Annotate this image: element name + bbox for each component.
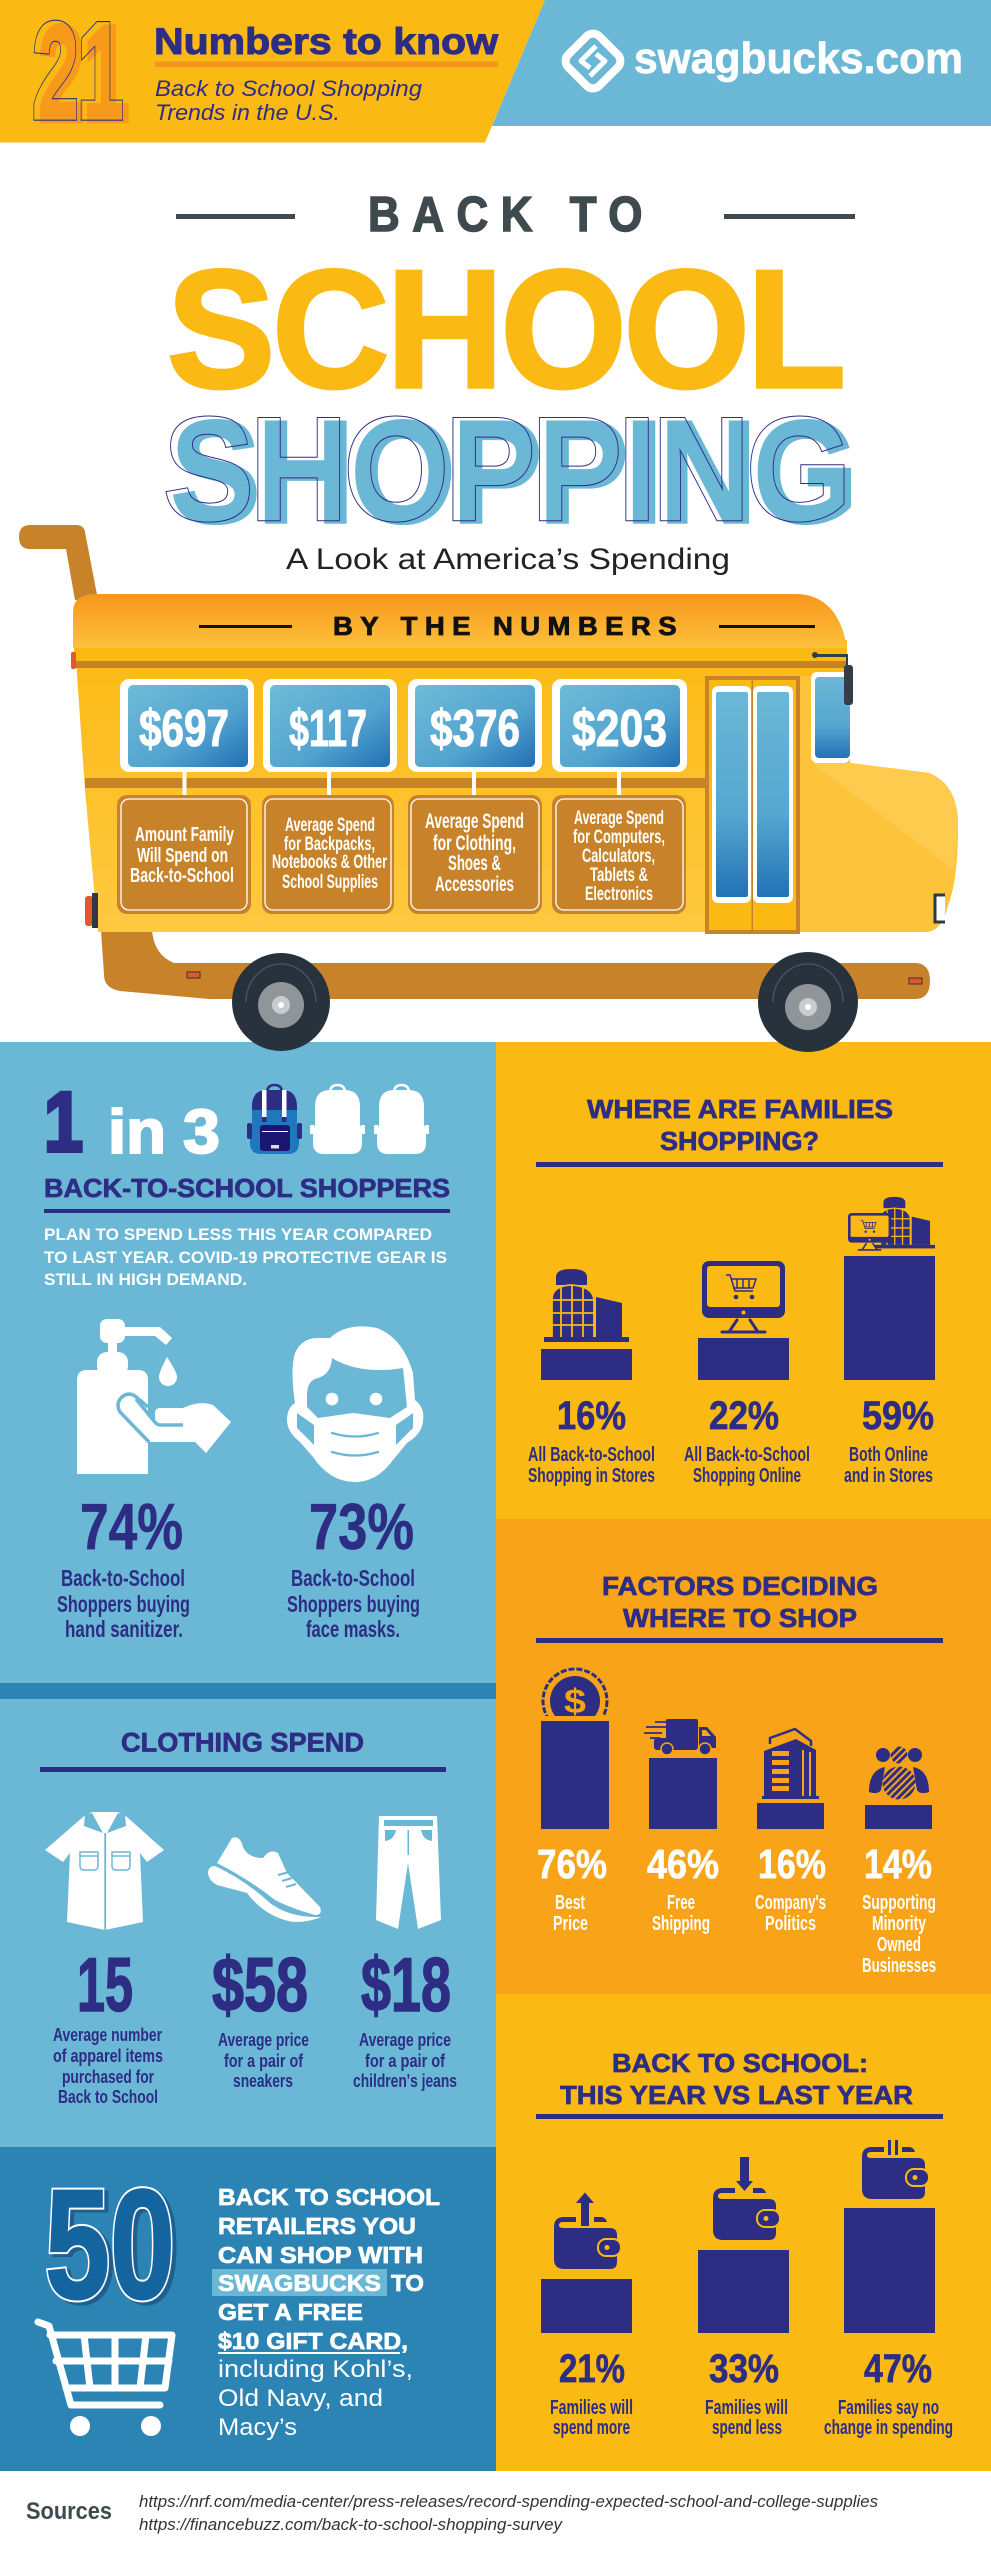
apparel items stat: of apparel items [53,2046,163,2066]
label box 4: for Computers, [573,827,665,848]
bus handle [19,525,98,600]
stat: online: 22% [709,1394,779,1438]
promo text: Macy’s [218,2414,297,2441]
label box 2: Average Spend [285,815,375,836]
apparel items stat: 15 [77,1943,133,2028]
back to heading [176,188,855,242]
source links [139,2492,878,2534]
shopping heading [165,416,852,526]
back to heading: BACK TO [368,188,655,242]
sneakers stat [212,1943,309,2091]
mirror [812,652,853,705]
school heading: SCHOOL [167,235,843,423]
mask stat [287,1490,420,1642]
number 21 [34,20,129,124]
number 21: 21 [39,0,129,149]
icon: jeans [376,1816,441,1929]
stat: both [844,1394,934,1487]
bus body [73,640,958,932]
1 in 3 figure [44,1075,220,1169]
header banner [0,0,991,149]
lower stripe [85,778,705,788]
window $117: $117 [289,700,367,758]
jeans stat: Average price [359,2030,451,2050]
jeans stat: $18 [361,1943,451,2028]
jeans stat: for a pair of [365,2051,446,2071]
mask stat: Shoppers buying [287,1591,420,1617]
apparel items stat: Average number [53,2025,162,2045]
shopping heading: SHOPPING [171,391,855,553]
hood highlight [812,763,958,870]
window $203 [552,679,687,772]
stat: both: 59% [862,1394,934,1438]
by the numbers heading [199,611,815,641]
stat: no change: Families say no [838,2397,939,2419]
clothing heading: CLOTHING SPEND [121,1728,364,1758]
stat: minority owned [862,1841,936,1977]
stat: company politics: Politics [765,1913,816,1935]
by the numbers heading: BY THE NUMBERS [333,611,684,641]
panel: swagbucks promo [0,2147,496,2471]
window $376 [408,679,542,772]
panel: clothing spend [0,1683,496,2147]
promo text: CAN SHOP WITH [218,2242,423,2268]
where heading: SHOPPING? [660,1126,819,1156]
source links: https://financebuzz.com/back-to-school-shopping-survey [139,2515,563,2534]
1 in 3 figure: 3 [183,1098,220,1167]
stat: best price: 76% [537,1841,607,1887]
side window [811,672,850,763]
icon: online monitor [702,1261,785,1332]
bus chassis [101,930,930,999]
label box 1 [117,795,251,914]
bus door [707,678,798,932]
label box 4: Tablets & [590,865,648,886]
apparel items stat: Back to School [58,2087,158,2107]
stat: company politics: Company's [755,1892,826,1914]
sources [26,2492,878,2534]
school bus illustration [19,525,958,1052]
bar chart: spending change [541,2208,935,2333]
stat: spend more [550,2347,633,2439]
window $697 [120,679,254,772]
number 50: 50 [45,2158,175,2332]
label box 3 [408,795,542,914]
sanitizer stat [57,1490,190,1642]
roof band [74,648,847,661]
panel: where are families shopping [496,1042,991,1519]
lights and bumpers [71,652,945,984]
label box 2: Notebooks & Other [272,852,387,873]
icon: store [544,1269,629,1342]
window $697: $697 [139,700,229,758]
factors rule [536,1638,943,1643]
label box 2: for Backpacks, [284,834,375,855]
label box 1: Will Spend on [137,845,228,867]
panel: factors deciding where to shop [496,1519,991,1994]
stat: both: Both Online [849,1444,928,1466]
header yellow panel [0,0,545,142]
window $376: $376 [430,700,520,758]
stat: online: All Back-to-School [684,1444,810,1466]
sanitizer stat: 74% [80,1490,183,1563]
icon: sneaker [208,1837,321,1922]
where heading [587,1094,893,1156]
icon: delivery truck [644,1719,716,1755]
bar chart: factors [541,1721,932,1829]
stat: free shipping: 46% [647,1841,719,1887]
mask stat: face masks. [306,1616,400,1642]
factors heading: FACTORS DECIDING [602,1571,878,1601]
icon: face mask [287,1326,423,1482]
stat: minority owned: Businesses [862,1955,936,1977]
stat: no change [824,2347,953,2439]
header rule [155,62,498,67]
icon: store and monitor [848,1197,935,1250]
heading rule [44,1209,450,1213]
icon: swagbucks logo [562,30,624,92]
mask stat: Back-to-School [291,1565,415,1591]
stat: stores [528,1394,655,1487]
stat: no change: 47% [864,2347,932,2391]
stat: best price [537,1841,607,1935]
stat: spend less: spend less [712,2417,782,2439]
label box 4: Calculators, [582,846,655,867]
stat: minority owned: Supporting [862,1892,936,1914]
header blue panel [492,0,991,126]
subtitle: A Look at America’s Spending [286,543,730,576]
icon: wallet up [554,2192,621,2269]
factors heading [602,1571,878,1633]
label box 3: Average Spend [425,810,524,833]
apparel items stat [53,1943,163,2107]
stat: free shipping [647,1841,719,1935]
sneakers stat: sneakers [233,2071,293,2091]
bar chart: shopping location [541,1256,935,1380]
stat: stores: Shopping in Stores [528,1465,655,1487]
stat: spend less [705,2347,788,2439]
stat: online [684,1394,810,1487]
sources label: Sources [26,2498,112,2525]
stat: spend more: 21% [559,2347,625,2391]
promo text: SWAGBUCKS [218,2270,381,2296]
sanitizer stat: Back-to-School [61,1565,185,1591]
bus roof [73,594,847,648]
upper stripe [76,661,847,668]
label box 3: Accessories [435,873,514,896]
numbers to know heading: Numbers to know [154,21,498,62]
sneakers stat: for a pair of [224,2051,304,2071]
icon: wallet down [713,2157,780,2240]
back-to-school shoppers heading: BACK-TO-SCHOOL SHOPPERS [44,1173,450,1203]
number 50: 50 [45,2158,175,2332]
promo text [212,2184,440,2441]
connectors [182,772,621,800]
rear wheel [758,952,858,1052]
intro text: STILL IN HIGH DEMAND. [44,1271,247,1289]
year heading: BACK TO SCHOOL: [612,2048,868,2078]
sanitizer stat: hand sanitizer. [65,1616,183,1642]
icon: price badge [542,1668,608,1716]
icon: backpacks [247,1085,429,1154]
sneakers stat: Average price [218,2030,309,2050]
icon: hand sanitizer [77,1319,231,1474]
main title [140,188,880,576]
swagbucks wordmark: swagbucks.com [634,34,963,83]
stat: free shipping: Shipping [652,1913,710,1935]
intro text: PLAN TO SPEND LESS THIS YEAR COMPARED [44,1226,432,1244]
label box 3: Shoes & [448,852,501,875]
sanitizer stat: Shoppers buying [57,1591,190,1617]
front wheel [232,953,330,1051]
label box 4 [552,795,686,914]
stat: spend less: Families will [705,2397,788,2419]
where heading: WHERE ARE FAMILIES [587,1094,893,1124]
1 in 3 figure: 1 [44,1075,83,1169]
year heading [560,2048,913,2110]
icon: shopping cart [38,2322,172,2436]
stat: online: Shopping Online [693,1465,801,1487]
header subtitle: Trends in the U.S. [155,100,340,125]
icon: people group [869,1746,929,1800]
stat: best price: Price [553,1913,588,1935]
stat: both: and in Stores [844,1465,933,1487]
promo text: RETAILERS YOU [218,2213,416,2239]
jeans stat [353,1943,457,2091]
icon: price badge: $ [564,1683,586,1721]
stat: spend less: 33% [709,2347,779,2391]
stat: minority owned: Owned [877,1934,921,1956]
label box 2 [262,795,394,914]
promo text: TO [391,2270,424,2296]
factors heading: WHERE TO SHOP [623,1603,857,1633]
header subtitle: Back to School Shopping [155,76,423,101]
bus hood [800,676,958,932]
icon: company building [762,1729,819,1799]
where rule [536,1162,943,1167]
icon: shirt [45,1812,164,1930]
stat: free shipping: Free [667,1892,695,1914]
intro text [44,1226,447,1289]
panel: this year vs last year [496,1994,991,2471]
number 50: 50 [49,2161,179,2335]
stat: minority owned: Minority [872,1913,927,1935]
promo text: $10 GIFT CARD, [218,2328,408,2354]
stat: stores: 16% [557,1394,626,1438]
swagbucks highlight [212,2269,387,2296]
label box 4: Average Spend [574,808,664,829]
window $203: $203 [572,700,667,758]
apparel items stat: purchased for [62,2067,154,2087]
year rule [536,2114,943,2119]
sneakers stat: $58 [212,1943,308,2028]
stat: company politics: 16% [758,1841,826,1887]
source links: https://nrf.com/media-center/press-releases/record-spending-expected-school-and-college-supplies [139,2492,878,2511]
promo text: GET A FREE [218,2299,363,2325]
stat: minority owned: 14% [864,1841,932,1887]
promo text: including Kohl’s, [218,2356,413,2383]
label box 1: Back-to-School [130,865,234,887]
icon: wallet no change [862,2140,929,2199]
intro text: TO LAST YEAR. COVID-19 PROTECTIVE GEAR IS [44,1249,447,1267]
stat: spend more: spend more [553,2417,630,2439]
1 in 3 figure: in [108,1098,166,1167]
window $117 [263,679,397,772]
panel: 1 in 3 shoppers [0,1042,496,1683]
label box 3: for Clothing, [433,832,516,855]
promo text: Old Navy, and [218,2385,383,2412]
stat: best price: Best [555,1892,585,1914]
clothing rule [40,1767,446,1772]
label box 2: School Supplies [282,872,378,893]
stat: spend more: Families will [550,2397,633,2419]
jeans stat: children's jeans [353,2071,457,2091]
label box 4: Electronics [585,884,653,905]
label box 1: Amount Family [135,824,235,846]
stat: company politics [755,1841,826,1935]
mask stat: 73% [309,1490,414,1563]
promo text: BACK TO SCHOOL [218,2184,440,2210]
stat: stores: All Back-to-School [528,1444,655,1466]
year heading: THIS YEAR VS LAST YEAR [560,2080,913,2110]
header subtitle [155,76,423,125]
